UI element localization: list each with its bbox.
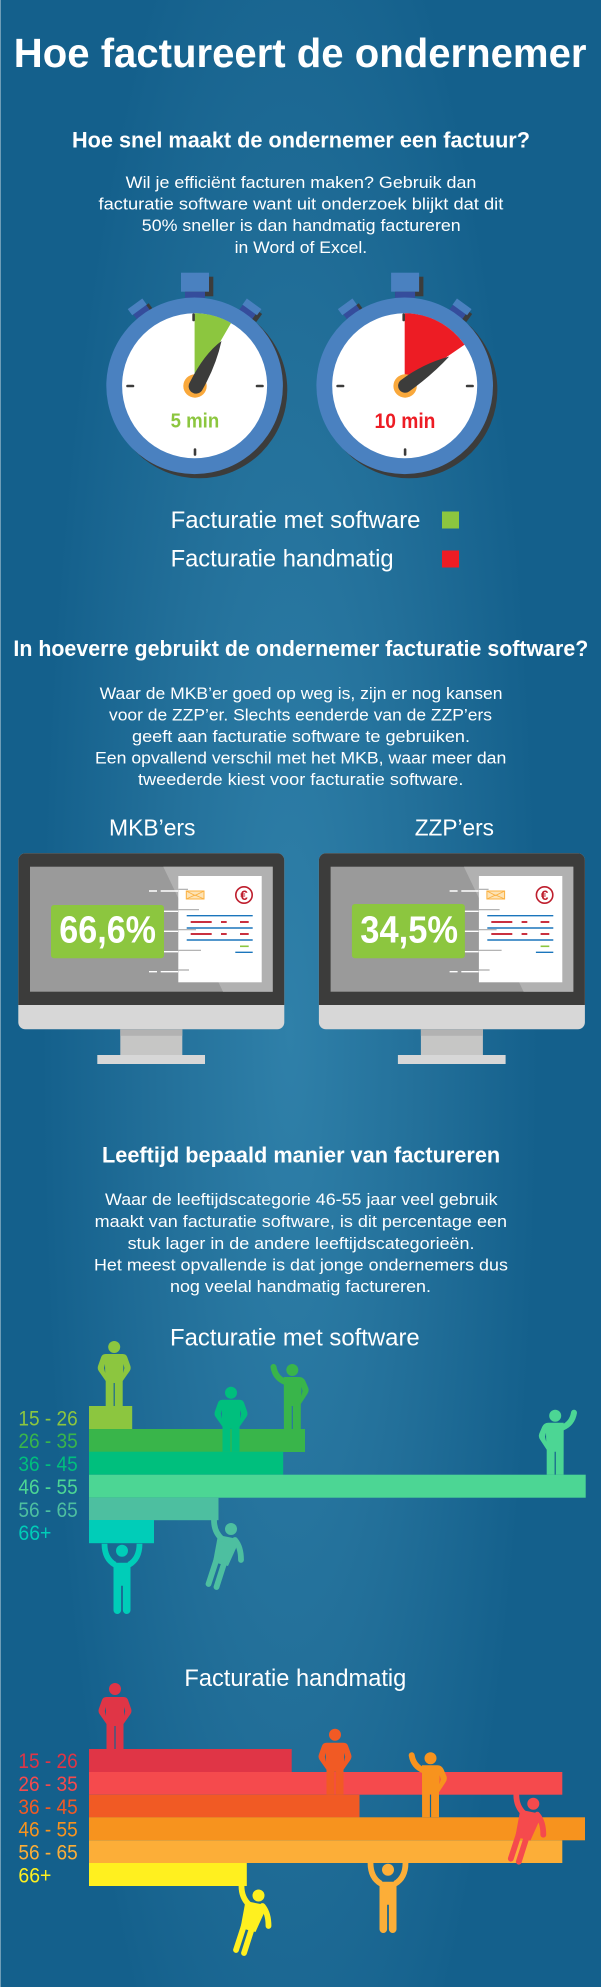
figure: waving on 46-55 [539,1410,574,1475]
legend: Facturatie met software [171,507,420,534]
age labels: software: 56 - 65 [18,1499,78,1522]
age labels: software [18,1407,78,1545]
icon: stopwatch 10 min [316,273,497,478]
bars: manual [89,1749,585,1886]
bars: software [89,1406,586,1543]
figure: standing on 26-35 manual [319,1729,351,1795]
figure: hanging from 26-35 manual [511,1795,543,1862]
legend: Facturatie handmatig [171,546,394,572]
age labels: manual: 56 - 65 [18,1842,78,1865]
stopwatch label: 10 min [374,410,435,433]
age labels: software: 26 - 35 [18,1430,78,1453]
chart: software by age [18,1324,586,1614]
text block: usage intro: geeft aan facturatie software te gebruiken. [132,727,470,746]
stat: 34,5%: 34,5% [360,910,458,952]
label: MKB'ers: MKB’ers [109,815,196,841]
age labels: manual: 26 - 35 [18,1773,78,1796]
figure: hanging from 56-65 [208,1520,241,1587]
heading: speed: Hoe snel maakt de ondernemer een factuur? [72,128,530,152]
figure: standing on 26-35 [215,1387,247,1452]
text block: usage intro: Een opvallend verschil met het MKB, waar meer dan [95,748,506,767]
heading: age: Leeftijd bepaald manier van factureren [102,1143,500,1168]
text block: speed intro [98,173,504,257]
panel: software usage [13,636,588,1064]
panel: speed of invoicing [72,128,530,572]
chart title: manual: Facturatie handmatig [184,1665,406,1692]
figure: lifting 56-65 manual [370,1863,406,1933]
age labels: manual: 66+ [18,1865,51,1888]
figure: hanging from 66+ manual [236,1886,268,1953]
text block: speed intro: facturatie software want uit onderzoek blijkt dat dit [98,195,504,214]
chart title: software: Facturatie met software [170,1324,420,1352]
panel: age [94,1143,508,1296]
text block: age intro: nog veelal handmatig factureren. [170,1277,431,1296]
text block: usage intro: voor de ZZP’er. Slechts eenderde van de ZZP’ers [109,705,492,724]
text block: age intro: Het meest opvallende is dat jonge ondernemers dus [94,1256,508,1274]
age labels: software: 36 - 45 [18,1453,78,1476]
text block: age intro: maakt van facturatie software, is dit percentage een [95,1212,507,1231]
age labels: manual: 15 - 26 [18,1750,78,1773]
icon: monitor ZZP [319,853,585,1064]
figure: waving on 46-55 manual [412,1752,447,1817]
stopwatch label: 5 min [171,410,219,432]
chart: manual by age [18,1665,585,1953]
title: Hoe factureert de ondernemer [14,30,587,76]
figure: standing on 15-26 [98,1341,131,1406]
text block: speed intro: 50% sneller is dan handmatig factureren [142,216,461,235]
figure: lifting 66+ [104,1544,140,1614]
figure: standing on 15-26 manual [99,1683,131,1749]
text block: usage intro: Waar de MKB’er goed op weg is, zijn er nog kansen [100,684,502,703]
age labels: software: 66+ [18,1522,51,1545]
label: ZZP'ers: ZZP’ers [415,815,494,841]
text block: speed intro: Wil je efficiënt facturen maken? Gebruik dan [126,173,476,192]
text block: age intro [94,1190,508,1296]
heading: usage: In hoeverre gebruikt de ondernemer facturatie software? [13,636,588,661]
text block: speed intro: in Word of Excel. [235,238,367,257]
age labels: manual: 36 - 45 [18,1796,78,1819]
text block: usage intro [95,684,506,789]
icon: monitor MKB [18,853,284,1064]
legend [171,507,459,572]
text block: age intro: Waar de leeftijdscategorie 46-55 jaar veel gebruik [105,1190,498,1209]
icon: monitor ZZP: € [541,888,549,903]
text block: usage intro: tweederde kiest voor facturatie software. [138,770,463,789]
stat: 66,6%: 66,6% [59,910,156,952]
age labels: software: 15 - 26 [18,1407,78,1430]
text block: age intro: stuk lager in de andere leeftijdscategorieën. [128,1234,474,1253]
figure: waving on 26-35 [274,1364,309,1429]
age labels: manual [18,1750,78,1888]
icon: monitor MKB: € [240,888,248,903]
age labels: software: 46 - 55 [18,1476,78,1499]
icon: stopwatch 5 min [106,273,287,478]
age labels: manual: 46 - 55 [18,1819,78,1842]
